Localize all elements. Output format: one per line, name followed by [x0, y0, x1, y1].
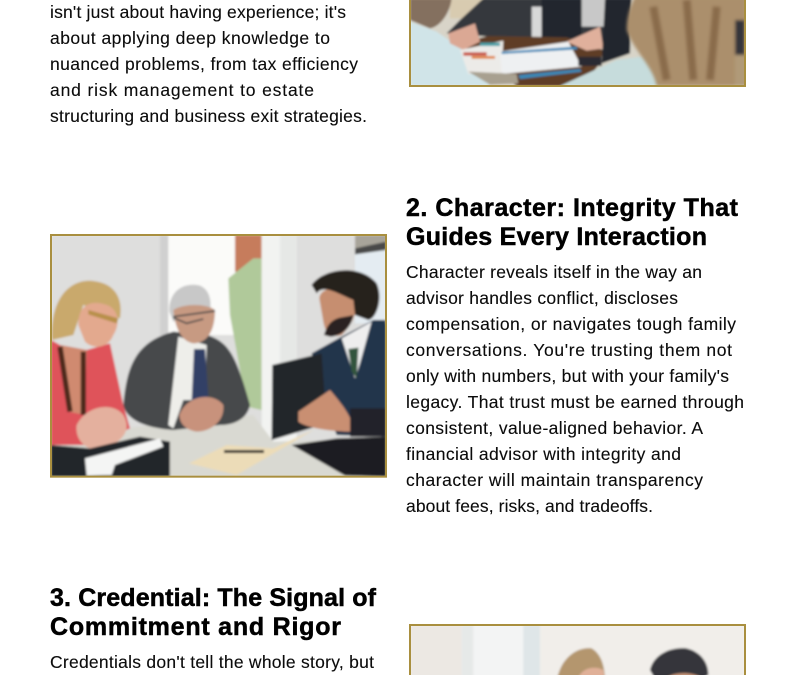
- text block: expertise paragraph ending: about applying deep knowledge to: [50, 28, 330, 48]
- text block: character paragraph: legacy. That trust must be earned through: [406, 392, 744, 412]
- text block: expertise paragraph ending: [50, 2, 367, 126]
- heading: section 3 credential: Commitment and Rigor: [50, 613, 341, 641]
- text block: character paragraph: only with numbers, but with your family's: [406, 366, 729, 386]
- heading: section 2 character: 2. Character: Integrity That: [406, 194, 739, 222]
- photo: advisor reviewing documents with clients: [410, 0, 747, 86]
- text block: character paragraph: compensation, or navigates tough family: [406, 314, 736, 334]
- text block: expertise paragraph ending: structuring and business exit strategies.: [50, 106, 367, 126]
- heading: section 2 character: Guides Every Interaction: [406, 223, 707, 251]
- text block: character paragraph: financial advisor with integrity and: [406, 444, 681, 464]
- text block: expertise paragraph ending: nuanced problems, from tax efficiency: [50, 54, 358, 74]
- text block: expertise paragraph ending: and risk management to estate: [50, 80, 314, 100]
- text block: credential paragraph start: Credentials don't tell the whole story, but: [50, 652, 374, 672]
- heading: section 2 character: [406, 194, 739, 251]
- text block: character paragraph: consistent, value-aligned behavior. A: [406, 418, 703, 438]
- text block: character paragraph: Character reveals itself in the way an: [406, 262, 702, 282]
- heading: section 3 credential: 3. Credential: The Signal of: [50, 584, 377, 612]
- text block: character paragraph: [406, 262, 744, 516]
- text block: character paragraph: conversations. You're trusting them not: [406, 340, 732, 360]
- text block: expertise paragraph ending: isn't just about having experience; it's: [50, 2, 346, 22]
- text block: character paragraph: about fees, risks, and tradeoffs.: [406, 496, 653, 516]
- text block: character paragraph: advisor handles conflict, discloses: [406, 288, 678, 308]
- photo: advisor meeting with senior couple: [51, 235, 387, 477]
- text block: character paragraph: character will maintain transparency: [406, 470, 703, 490]
- heading: section 3 credential: [50, 584, 377, 641]
- photo: advisor and client in bright office: [410, 625, 745, 675]
